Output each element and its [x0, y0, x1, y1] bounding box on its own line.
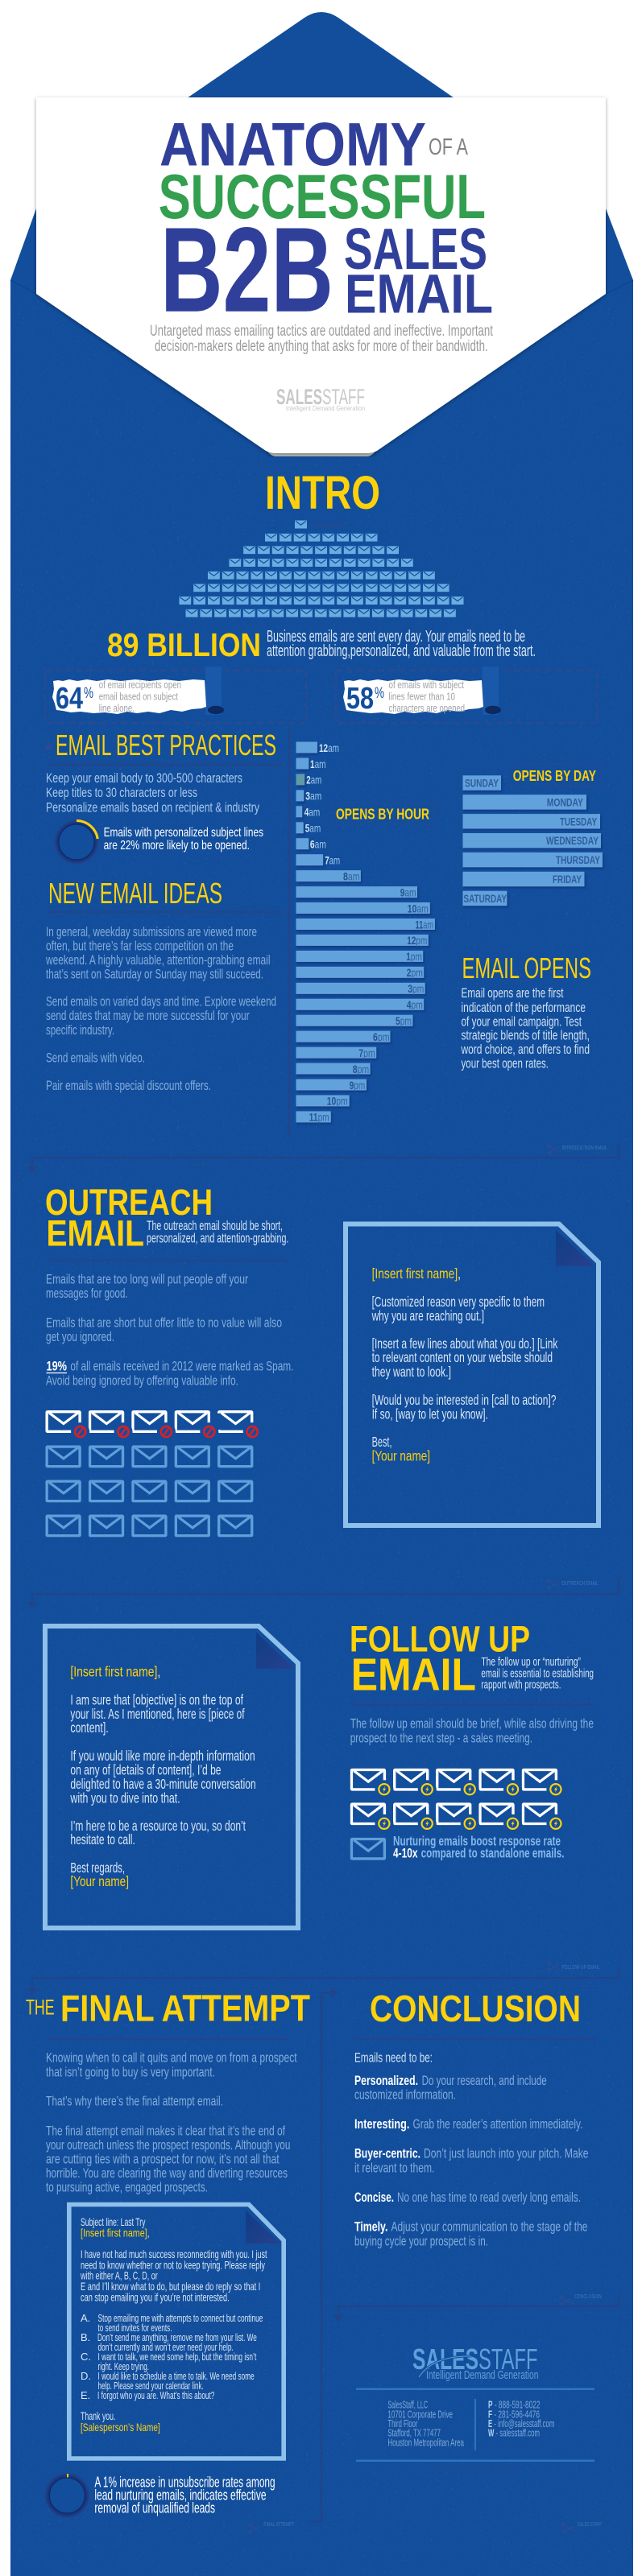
email template: final attempt: can stop emailing you if you’re not interested. [81, 2290, 230, 2303]
bar chart: opens by day: SUNDAY [465, 776, 499, 789]
bar chart: opens by day [462, 775, 603, 906]
callout: 64 percent: of email recipients open [99, 679, 181, 691]
callout: nurturing stat: Nurturing emails boost response rate [393, 1833, 561, 1848]
text: outreach body: 19% [47, 1359, 67, 1374]
text: outreach summary: The outreach email should be short, [147, 1218, 283, 1233]
email template: final attempt: A. [81, 2312, 90, 2324]
text: email opens: indication of the performance [461, 1000, 586, 1015]
divider: column [288, 729, 290, 1136]
tagline: decision-makers delete anything that asks for more of their bandwidth. [155, 338, 488, 355]
text: outreach body: get you ignored. [46, 1329, 114, 1344]
text: address [387, 2399, 464, 2448]
callout: 58 percent: characters are opened [388, 702, 465, 714]
text: conclusion list: Interesting. [354, 2116, 409, 2132]
text: new email ideas: Send emails with video. [46, 1051, 145, 1066]
title: OF A [429, 134, 468, 160]
callout: 64 percent: line alone. [99, 702, 135, 714]
text: conclusion list [354, 2050, 588, 2248]
text: outreach body [46, 1272, 293, 1388]
bar chart: opens by day: WEDNESDAY [546, 834, 599, 847]
text: unsubscribe stat: lead nurturing emails, indicates effective [94, 2487, 267, 2503]
email template: final attempt [69, 2204, 284, 2458]
logo: SalesStaff: STAFF [322, 385, 365, 409]
logo: SalesStaff: STAFF [478, 2343, 538, 2376]
tab: outreach email [548, 1579, 599, 1589]
text: conclusion list: customized information. [354, 2087, 456, 2102]
tab: outreach email: OUTREACH EMAIL [562, 1579, 599, 1587]
text: outreach summary [147, 1218, 288, 1246]
text: unsubscribe stat [94, 2474, 275, 2516]
text: final attempt body: are cutting ties with a prospect for now, it’s not all that [46, 2152, 280, 2167]
text: address: 10701 Corporate Drive [387, 2408, 453, 2420]
text: new email ideas: that’s sent on Saturday or Sunday may still succeed. [46, 966, 263, 982]
arrow: final attempt to conclusion [310, 1988, 338, 2521]
logo: SalesStaff: SALES [276, 385, 322, 409]
bar chart: opens by hour: 9am [400, 886, 416, 898]
panel: follow up email [45, 1619, 600, 1971]
text: conclusion list: buying cycle your prospect is in. [354, 2233, 488, 2248]
email template: outreach [346, 1224, 599, 1525]
list: best practices: Personalize emails based on recipient & industry [46, 800, 259, 815]
tab: final attempt [249, 2520, 295, 2533]
bar chart: opens by hour: 3pm [408, 982, 424, 995]
callout: 64 percent: email based on subject [99, 691, 178, 702]
text: new email ideas: often, but there’s far less competition on the [46, 939, 234, 954]
text: follow up summary [481, 1655, 594, 1692]
email template: outreach: [Your name] [372, 1447, 430, 1463]
text: business emails [267, 628, 536, 660]
heading: email best practices [44, 729, 276, 762]
text: outreach body: Emails that are too long will put people off your [46, 1272, 248, 1287]
text: contact details: E - info@salesstaff.com [488, 2417, 554, 2429]
title: ANATOMY [159, 111, 426, 180]
text: outreach body: Emails that are short but offer little to no value will also [46, 1315, 282, 1331]
tagline [150, 323, 493, 355]
credit: Design Created By Adhere Creative [432, 2462, 520, 2472]
text: contact details: P - 888-591-8022 [488, 2399, 540, 2411]
bar chart: opens by hour: 1pm [406, 950, 422, 963]
bar chart: opens by hour: 11pm [309, 1111, 329, 1124]
chart label: opens by hour: OPENS BY HOUR [336, 807, 429, 823]
logo: SalesStaff: Intelligent Demand Generation [426, 2368, 538, 2382]
icons: nurturing envelopes [351, 1769, 565, 1833]
tab: conclusion [560, 2293, 602, 2306]
bar chart: opens by hour: 12am [319, 741, 339, 754]
email template: outreach: Best, [372, 1434, 391, 1450]
heading: follow up email: EMAIL [351, 1649, 476, 1700]
bar chart: opens by day: SATURDAY [464, 892, 507, 905]
text: new email ideas [45, 924, 276, 1093]
logo: SalesStaff [412, 2343, 538, 2382]
email template: final attempt: [Salesperson’s Name] [81, 2421, 160, 2434]
bar chart: opens by hour: 9pm [350, 1079, 365, 1092]
callout: 64 percent [45, 667, 306, 723]
list: best practices [46, 770, 259, 815]
text: outreach body: of all emails received in 2012 were marked as Spam. [70, 1359, 293, 1374]
text: contact details: F - 281-596-4476 [488, 2408, 540, 2420]
bar chart: opens by hour: 8am [343, 869, 359, 882]
divider: outreach [47, 1259, 288, 1261]
tab: conclusion: CONCLUSION [574, 2293, 602, 2300]
bar chart: opens by hour: 5am [305, 822, 321, 835]
callout: nurturing stat: compared to standalone emails. [421, 1845, 564, 1860]
section frames [19, 464, 623, 2528]
bar chart: opens by hour: 4pm [407, 998, 423, 1011]
email template: final attempt: Don’t send me anything, remove me from your list. We [97, 2331, 257, 2343]
email template: follow up: Best regards, [70, 1860, 125, 1876]
heading: follow up email: FOLLOW UP [350, 1619, 530, 1660]
divider: best practices [47, 764, 283, 766]
email template: final attempt: [Insert first name], [81, 2226, 150, 2239]
email template: final attempt: right. Keep trying. [98, 2360, 149, 2372]
text: personalized subject lines [104, 826, 263, 852]
email template: outreach: why you are reaching out.] [371, 1307, 484, 1323]
divider: final attempt [47, 2037, 288, 2040]
text: email opens: of your email campaign. Test [461, 1014, 582, 1029]
panel: outreach email [45, 1182, 599, 1589]
bar chart: opens by day: THURSDAY [556, 853, 600, 866]
arrow: conclusion to company info [333, 2294, 619, 2322]
panel: conclusion [354, 1988, 602, 2306]
title: B2B [160, 202, 333, 337]
title: SALES [344, 217, 487, 282]
text: new email ideas: In general, weekday submissions are viewed more [46, 924, 257, 939]
email template: follow up: on any of [details of content], I’d be [70, 1762, 222, 1778]
bar chart: opens by hour: 8pm [353, 1063, 369, 1075]
email template: follow up: with you to dive into that. [70, 1790, 180, 1806]
heading: conclusion: CONCLUSION [370, 1988, 581, 2029]
bar chart: opens by hour: 5pm [396, 1014, 412, 1027]
tab: introduction email: INTRODUCTION EMAIL [562, 1144, 607, 1151]
bar chart: opens by hour: 2am [306, 774, 321, 786]
text: conclusion list: Personalized. [354, 2073, 418, 2088]
callout: 58 percent: of emails with subject [388, 679, 464, 691]
email template: final attempt: I would like to schedule a time to talk. We need some [98, 2370, 255, 2382]
email template: follow up: hesitate to call. [70, 1831, 135, 1847]
bar chart: opens by hour: 7pm [358, 1046, 375, 1059]
text: follow up summary: The follow up or “nurturing” [481, 1655, 581, 1669]
chart label: opens by day [508, 764, 602, 786]
email template: final attempt: Thank you. [81, 2409, 115, 2422]
text: conclusion list: it relevant to them. [354, 2160, 434, 2175]
pictogram: 1 billion emails pyramid [179, 520, 464, 617]
email template: final attempt: B. [81, 2331, 90, 2343]
text: new email ideas: weekend. A highly valuable, attention-grabbing email [45, 952, 270, 968]
logo: SalesStaff: Intelligent Demand Generation [286, 405, 365, 412]
stat: 89 billion: 89 BILLION [107, 626, 261, 663]
email template: follow up: delighted to have a 30-minute conversation [70, 1776, 256, 1792]
tab: follow up email [548, 1962, 600, 1971]
email template: final attempt: Stop emailing me with attempts to connect but continue [98, 2312, 263, 2324]
text: personalized subject lines: Emails with personalized subject lines [104, 826, 263, 840]
email template: final attempt: don’t currently and won’t ever need your help. [98, 2341, 234, 2353]
title: EMAIL [345, 262, 493, 324]
email template: outreach: [Would you be interested in [call to action]? [372, 1392, 557, 1408]
text: conclusion list: Concise. [354, 2190, 394, 2205]
text: contact details [488, 2399, 554, 2439]
text: new email ideas: send dates that may be more successful for your [46, 1008, 250, 1023]
divider: contact vertical [474, 2399, 476, 2450]
email template: follow up: your list. As I mentioned, here is [piece of [70, 1706, 245, 1722]
text: address: Houston Metropolitan Area [387, 2436, 464, 2448]
tab: introduction email [548, 1144, 607, 1154]
email template: final attempt: need to know whether or not to keep trying. Please reply [81, 2258, 265, 2271]
text: email opens: word choice, and offers to find [461, 1042, 590, 1057]
panel: company info [356, 2343, 602, 2533]
text: follow up body [350, 1716, 594, 1745]
email template: final attempt: I have not had much success reconnecting with you. I just [81, 2248, 267, 2260]
email template: follow up: [Insert first name], [70, 1664, 160, 1680]
heading: outreach email: OUTREACH [45, 1182, 213, 1223]
email template: follow up: I am sure that [objective] is on the top of [70, 1692, 243, 1708]
text: address: Stafford, TX 77477 [387, 2427, 441, 2439]
email template: final attempt: D. [81, 2370, 91, 2382]
panel: final attempt [26, 1988, 310, 2533]
email template: final attempt: help. Please send your calendar link. [98, 2380, 204, 2392]
text: new email ideas: Send emails on varied days and time. Explore weekend [46, 994, 276, 1009]
text: follow up summary: rapport with prospects. [481, 1678, 561, 1692]
heading: email best practices: EMAIL BEST PRACTICES [56, 729, 276, 762]
text: final attempt body: The final attempt email makes it clear that it’s the end of [46, 2124, 285, 2139]
list: best practices: Keep your email body to 300-500 characters [46, 770, 242, 786]
bar chart: opens by day: MONDAY [547, 795, 583, 808]
heading: final attempt: FINAL ATTEMPT [60, 1988, 310, 2029]
text: email opens: your best open rates. [461, 1056, 549, 1071]
panel: intro [44, 467, 607, 1154]
callout: nurturing stat: 4-10x [393, 1845, 418, 1860]
text: outreach summary: personalized, and attention-grabbing. [147, 1231, 288, 1246]
text: contact details: W - salesstaff.com [488, 2427, 540, 2439]
callout: 58 percent: 58 [346, 682, 374, 716]
text: email opens: strategic blends of title length, [461, 1028, 590, 1043]
email template: outreach: If so, [way to let you know]. [372, 1406, 488, 1422]
text: email opens [461, 985, 590, 1071]
email template: follow up [45, 1626, 298, 1928]
heading: outreach email [45, 1182, 213, 1254]
text: final attempt body: That’s why there’s the final attempt email. [46, 2094, 223, 2109]
bar chart: opens by hour: 2pm [407, 966, 423, 979]
list: best practices: Keep titles to 30 characters or less [46, 785, 197, 800]
divider: contact top [356, 2388, 594, 2390]
text: new email ideas: specific industry. [46, 1022, 114, 1038]
logo: SalesStaff: SALES [412, 2343, 478, 2376]
panel: letter [36, 97, 606, 456]
tab: final attempt: FINAL ATTEMPT [263, 2520, 295, 2528]
email template: follow up: [Your name] [70, 1873, 129, 1889]
chart label: opens by hour [332, 803, 435, 824]
arrow: outreach to follow up [27, 1579, 619, 1608]
email template: outreach: they want to look.] [372, 1364, 451, 1380]
text: final attempt body: horrible. You are clearing the way and diverting resources [46, 2165, 288, 2181]
divider: contact bottom [356, 2459, 594, 2462]
text: address: SalesStaff, LLC [387, 2399, 428, 2411]
email template: final attempt: I want to talk, we need some help, but the timing isn’t [98, 2351, 257, 2363]
bar chart: opens by hour: 12pm [407, 934, 427, 947]
text: unsubscribe stat: removal of unqualified leads [94, 2500, 215, 2516]
heading: final attempt: THE [26, 1996, 55, 2020]
divider: conclusion [354, 2037, 596, 2040]
tab: sales staff [562, 2520, 602, 2533]
heading: email best practices: * [44, 738, 53, 762]
title [159, 111, 493, 337]
text: address: Third Floor [387, 2417, 418, 2429]
bar chart: opens by hour: 4am [304, 806, 320, 819]
text: email opens: Email opens are the first [461, 985, 564, 1001]
callout: nurturing stat [351, 1833, 564, 1860]
chart: 22 percent ring [54, 819, 99, 865]
email template: outreach: [Customized reason very specific to them [372, 1294, 545, 1310]
tab: sales staff: SALES STAFF [578, 2520, 602, 2528]
email template: follow up: I’m here to be a resource to you, so don’t [70, 1818, 246, 1834]
divider: new ideas [47, 911, 283, 913]
text: unsubscribe stat: A 1% increase in unsubscribe rates among [94, 2474, 275, 2490]
email template: final attempt: with either A, B, C, D, or [80, 2269, 158, 2282]
text: personalized subject lines: are 22% more likely to be opened. [104, 839, 250, 852]
email template: outreach: to relevant content on your website should [372, 1349, 553, 1365]
text: conclusion list: Emails need to be: [354, 2050, 433, 2066]
bar chart: opens by hour: 1am [310, 758, 325, 770]
chart: 1 percent ring [44, 2473, 90, 2518]
bar chart: opens by hour: 11am [416, 918, 433, 931]
icons: remaining envelopes [47, 1447, 252, 1536]
arrow: follow up to final attempt [27, 1966, 619, 1995]
bar chart: opens by hour: 6am [310, 837, 326, 850]
email template: follow up: If you would like more in-depth information [70, 1748, 255, 1764]
text: conclusion list: Timely. [354, 2219, 387, 2235]
bar chart: opens by hour: 7am [325, 853, 340, 866]
text: conclusion list: Buyer-centric. [354, 2146, 420, 2161]
bar chart: opens by hour: 6pm [373, 1030, 390, 1043]
text: final attempt body: to pursuing active, engaged prospects. [46, 2179, 208, 2194]
tab: follow up email: FOLLOW UP EMAIL [562, 1963, 600, 1971]
callout: 58 percent [336, 667, 597, 723]
text: final attempt body: that isn’t going to buy is very important. [46, 2064, 215, 2079]
heading: outreach email: EMAIL [47, 1212, 144, 1254]
text: final attempt body: Knowing when to call it quits and move on from a prospect [46, 2050, 297, 2066]
email template: final attempt: I forgot who you are. What’s this about? [97, 2389, 214, 2401]
text: outreach body: Avoid being ignored by offering valuable info. [46, 1373, 238, 1388]
heading: follow up email [350, 1619, 530, 1700]
bar chart: opens by hour: 10am [408, 902, 429, 914]
email template: final attempt: to send invites for events. [98, 2322, 172, 2334]
tagline: Untargeted mass emailing tactics are outdated and ineffective. Important [150, 323, 493, 340]
heading: intro: INTRO [265, 467, 380, 519]
email template: final attempt: Subject line: Last Try [81, 2215, 145, 2228]
bar chart: opens by hour [296, 741, 435, 1124]
text: follow up body: prospect to the next step - a sales meeting. [350, 1730, 532, 1745]
icons: spam envelopes [47, 1412, 262, 1441]
text: new email ideas: Pair emails with special discount offers. [46, 1078, 211, 1093]
callout: 64 percent: 64 [56, 682, 83, 716]
text: final attempt body [46, 2050, 297, 2194]
chart label: opens by day: OPENS BY DAY [513, 768, 596, 784]
pictogram: 1 billion emails pyramid: X 1BILLION [309, 521, 347, 530]
divider: follow up [351, 1703, 593, 1706]
email template: final attempt: E. [81, 2389, 90, 2401]
email template: final attempt: C. [81, 2351, 91, 2363]
bar chart: opens by day: TUESDAY [560, 815, 597, 828]
bar chart: opens by hour: 10pm [327, 1095, 348, 1108]
email template: outreach: [Insert a few lines about what you do.] [Link [372, 1335, 558, 1352]
bar chart: opens by hour: 3am [305, 790, 321, 803]
email template: outreach: [Insert first name], [372, 1265, 461, 1282]
callout: 58 percent: % [375, 685, 384, 702]
email template: follow up: content]. [70, 1719, 109, 1736]
arrow: intro to outreach [27, 1143, 619, 1174]
callout: 58 percent: lines fewer than 10 [388, 691, 455, 702]
email template: final attempt: E and I’ll know what to do, but please do reply so that I [81, 2280, 260, 2293]
title: SUCCESSFUL [159, 161, 486, 232]
bar chart: opens by day: FRIDAY [553, 873, 582, 886]
callout: 64 percent: % [84, 685, 93, 702]
heading: new email ideas: NEW EMAIL IDEAS [48, 877, 222, 910]
text: final attempt body: your outreach unless the prospect responds. Although you [46, 2137, 290, 2153]
text: conclusion list: Do your research, and include [422, 2073, 547, 2088]
text: outreach body: messages for good. [46, 1286, 128, 1301]
